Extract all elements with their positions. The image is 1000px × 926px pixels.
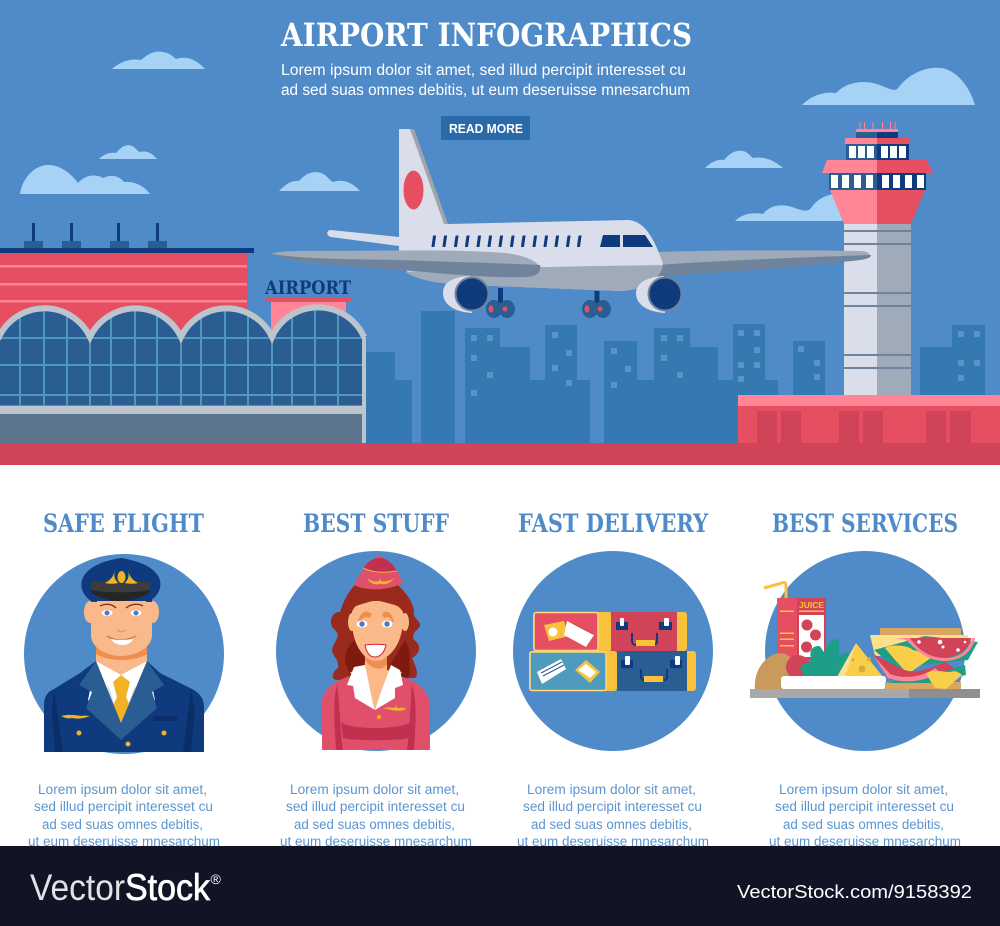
tail fin bbox=[399, 129, 448, 245]
right wing bbox=[655, 250, 870, 277]
icon: food tray bbox=[750, 551, 980, 751]
control tower bbox=[822, 122, 933, 395]
attendant hair bbox=[331, 585, 420, 680]
attendant head bbox=[346, 596, 409, 661]
attendant hat bbox=[354, 556, 403, 589]
pilot jacket bbox=[44, 661, 204, 752]
attendant jacket bbox=[322, 676, 430, 750]
sandwich bbox=[870, 628, 978, 689]
airplane bbox=[272, 129, 871, 318]
attendant neck bbox=[350, 645, 402, 712]
text: safe flight bbox=[28, 782, 220, 849]
roof antennas bbox=[24, 223, 167, 248]
tower base building bbox=[738, 395, 1000, 443]
bread roll bbox=[755, 653, 796, 689]
cockpit windows bbox=[600, 235, 653, 247]
text: best stuff: ut eum deseruisse mnesarchum bbox=[280, 834, 472, 849]
terminal building bbox=[0, 223, 366, 443]
pilot shirt bbox=[88, 661, 155, 728]
pilot badges bbox=[61, 715, 166, 746]
white lower section bbox=[0, 465, 1000, 846]
title: AIRPORT INFOGRAPHICS bbox=[280, 16, 692, 54]
red suitcase with tags bbox=[533, 612, 612, 651]
teal suitcase with tags bbox=[529, 651, 617, 691]
pilot head bbox=[84, 590, 159, 656]
crimson suitcase bbox=[611, 612, 687, 651]
text: fast delivery: ut eum deseruisse mnesarchum bbox=[517, 834, 709, 849]
airport sign: AIRPORT bbox=[264, 277, 351, 299]
glazed facade bbox=[0, 300, 364, 406]
pilot cap bbox=[81, 558, 160, 601]
text: best services: sed illud percipit interesset cu bbox=[775, 799, 954, 814]
text: best services: ad sed suas omnes debitis, bbox=[783, 817, 944, 832]
clouds bbox=[20, 52, 975, 221]
lettuce bbox=[800, 639, 849, 677]
text: best stuff: ad sed suas omnes debitis, bbox=[294, 817, 455, 832]
pilot tie bbox=[112, 675, 131, 723]
ground strip bbox=[0, 443, 1000, 465]
pilot lapels bbox=[79, 661, 164, 740]
heading: fast delivery: FAST DELIVERY bbox=[518, 509, 709, 538]
navy suitcase bbox=[617, 651, 696, 691]
cabin windows bbox=[432, 236, 581, 246]
fuselage bbox=[399, 220, 663, 291]
landing gear bbox=[486, 288, 611, 318]
text: best stuff: Lorem ipsum dolor sit amet, bbox=[290, 782, 459, 797]
airport sign bbox=[264, 277, 351, 342]
icon: flight attendant bbox=[276, 551, 476, 751]
juice box bbox=[764, 582, 826, 660]
tower cab bbox=[822, 122, 933, 224]
heading: safe flight: SAFE FLIGHT bbox=[43, 509, 204, 538]
intro text: Lorem ipsum dolor sit amet, sed illud percipit interesset cu bbox=[281, 62, 686, 79]
pilot neck bbox=[96, 640, 147, 676]
city skyline bbox=[366, 311, 985, 443]
footer logo bbox=[30, 867, 222, 908]
tray bbox=[750, 689, 909, 698]
icon: pilot bbox=[24, 554, 224, 754]
tomato bbox=[786, 655, 810, 679]
text: safe flight: Lorem ipsum dolor sit amet, bbox=[38, 782, 207, 797]
footer url: VectorStock.com/9158392 bbox=[737, 881, 972, 902]
text: safe flight: ad sed suas omnes debitis, bbox=[42, 817, 203, 832]
attendant badge bbox=[377, 705, 406, 719]
tower shaft bbox=[844, 224, 911, 395]
attendant collar bbox=[347, 665, 375, 710]
sky background bbox=[0, 0, 1000, 465]
footer logo: ® bbox=[210, 871, 222, 887]
juice box: JUICE bbox=[799, 600, 824, 610]
footer bar bbox=[0, 846, 1000, 926]
tail stabiliser bbox=[327, 230, 399, 246]
icon: luggage bbox=[513, 551, 713, 751]
text: fast delivery bbox=[517, 782, 709, 849]
cheese wedge bbox=[837, 643, 883, 677]
text: safe flight: sed illud percipit interesset cu bbox=[34, 799, 213, 814]
read more button: READ MORE bbox=[449, 121, 523, 136]
text: best services bbox=[769, 782, 961, 849]
text: safe flight: ut eum deseruisse mnesarchum bbox=[28, 834, 220, 849]
text: best services: ut eum deseruisse mnesarchum bbox=[769, 834, 961, 849]
text: best services: Lorem ipsum dolor sit amet, bbox=[779, 782, 948, 797]
plate bbox=[781, 676, 886, 689]
engines bbox=[443, 276, 682, 313]
text: fast delivery: Lorem ipsum dolor sit amet, bbox=[527, 782, 696, 797]
footer logo: Vector bbox=[30, 867, 125, 908]
intro text bbox=[281, 62, 690, 99]
text: best stuff bbox=[280, 782, 472, 849]
intro text: ad sed suas omnes debitis, ut eum deseruisse mnesarchum bbox=[281, 82, 690, 99]
text: best stuff: sed illud percipit interesset cu bbox=[286, 799, 465, 814]
text: fast delivery: ad sed suas omnes debitis, bbox=[531, 817, 692, 832]
left wing bbox=[272, 250, 541, 277]
text: fast delivery: sed illud percipit interesset cu bbox=[523, 799, 702, 814]
read more button bbox=[441, 116, 530, 140]
heading: best stuff: BEST STUFF bbox=[303, 509, 449, 538]
footer logo: Stock bbox=[125, 867, 210, 908]
heading: best services: BEST SERVICES bbox=[772, 509, 958, 538]
